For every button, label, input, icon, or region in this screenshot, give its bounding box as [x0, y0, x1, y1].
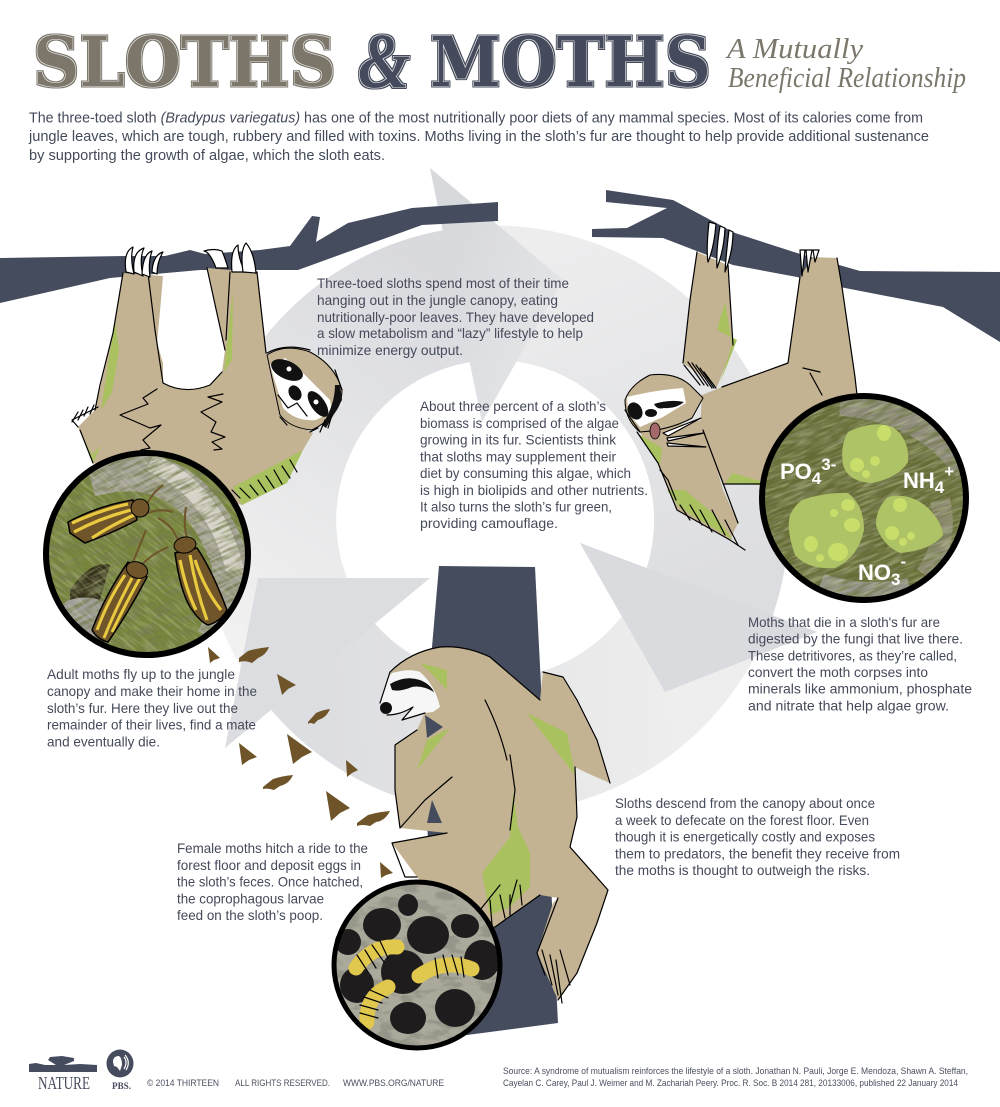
label: phosphate: 4	[812, 469, 822, 488]
hand claws on branch	[707, 222, 819, 276]
caption: adult moths: canopy and make their home in the	[47, 683, 257, 699]
moth: lower left	[92, 530, 168, 642]
eye band and nose	[380, 678, 434, 714]
circle ring	[762, 396, 966, 600]
fur background	[765, 399, 963, 597]
caption: descent: them to predators, the benefit they receive from	[615, 846, 900, 862]
caption: canopy: a slow metabolism and “lazy” lifestyle to help	[317, 325, 583, 341]
footer copyright: WWW.PBS.ORG/NATURE	[343, 1078, 444, 1089]
logo: PBS: PBS.	[112, 1082, 131, 1092]
label: nitrate: NO	[858, 560, 891, 585]
logo: Nature: NATURE	[38, 1073, 90, 1093]
caption: fungi: digested by the fungi that live there.	[748, 630, 963, 646]
claws on chest	[663, 418, 706, 447]
intro paragraph	[28, 110, 929, 164]
intro paragraph: The three-toed sloth (Bradypus variegatus) has one of the most nutritionally poor diets of any mammal species. Most of its calories come from	[29, 110, 923, 126]
caption: adult moths: sloth’s fur. Here they live out the	[47, 700, 238, 716]
intro paragraph: by supporting the growth of algae, which the sloth eats.	[29, 147, 385, 164]
algae cell: lower left	[789, 493, 864, 568]
tongue	[650, 423, 660, 439]
fur sketch lines	[380, 647, 610, 1000]
algae patches	[637, 302, 763, 540]
sloth hanging from right branch	[624, 222, 858, 550]
sloth hanging from left branch	[72, 243, 342, 505]
caption: adult moths: remainder of their lives, find a mate	[47, 716, 256, 732]
caption: fungi: These detritivores, as they’re called,	[748, 648, 957, 664]
caption: canopy	[317, 275, 594, 358]
caption: algae biomass: providing camouflage.	[420, 515, 558, 531]
raised arm	[683, 252, 733, 387]
caption: fungi: convert the moth corpses into	[748, 664, 928, 680]
caption: algae biomass: diet by consuming this algae, which	[420, 465, 631, 481]
head	[625, 374, 703, 432]
fur sketch lines	[625, 252, 857, 550]
logo: Nature	[29, 1056, 97, 1093]
title ampersand: &	[358, 17, 410, 104]
sloth climbing the trunk	[380, 647, 610, 1003]
label: ammonium: NH	[903, 468, 935, 493]
caption: female moths: feed on the sloth’s poop.	[177, 907, 323, 923]
caption: algae biomass: biomass is comprised of the algae	[420, 415, 619, 431]
caption: fungi	[748, 614, 972, 714]
label: ammonium: +	[944, 462, 954, 481]
caption: descent: a week to defecate on the forest floor. Even	[615, 812, 869, 828]
caption: algae biomass: About three percent of a sloth’s	[420, 398, 606, 414]
caption: female moths: Female moths hitch a ride to the	[177, 840, 368, 856]
caption: algae biomass: It also turns the sloth’s fur green,	[420, 498, 612, 514]
hatch fur	[490, 885, 570, 1003]
caption: canopy: nutritionally-poor leaves. They have developed	[317, 309, 594, 325]
fur background	[49, 456, 245, 652]
face mask	[380, 670, 440, 720]
caption: fungi: and nitrate that help algae grow.	[748, 698, 949, 714]
label: phosphate: PO	[780, 459, 812, 484]
caption: female moths: forest floor and deposit eggs in	[177, 857, 361, 873]
subtitle	[725, 33, 966, 94]
caption: adult moths: and eventually die.	[47, 734, 160, 750]
label: ammonium: 4	[935, 478, 945, 497]
moth: upper left	[68, 485, 173, 543]
sloth face mask	[270, 358, 332, 420]
caption: female moths	[177, 840, 368, 923]
subtitle: Beneficial Relationship	[728, 62, 966, 94]
sloth body	[78, 268, 313, 505]
algae cell: top	[842, 424, 908, 483]
left branch	[0, 202, 498, 303]
sloth eyes and nose	[268, 355, 342, 428]
caption: descent: though it is energetically costly and exposes	[615, 828, 875, 844]
caption: fungi: Moths that die in a sloth's fur are	[748, 614, 940, 630]
sloth left claws	[125, 243, 256, 277]
sloth algae patches	[83, 290, 303, 505]
caption: canopy: Three-toed sloths spend most of their time	[317, 275, 569, 291]
magnified circle: larvae in feces	[330, 880, 505, 1050]
arrow band: right to left along the bottom	[225, 543, 817, 813]
caption: algae biomass: growing in its fur. Scientists think	[420, 432, 617, 448]
lower arm	[640, 420, 738, 540]
sloth body	[390, 647, 610, 1000]
caption: algae biomass	[420, 398, 648, 531]
circle ring	[46, 453, 248, 655]
logo: PBS	[106, 1050, 134, 1092]
caption: female moths: the sloth’s feces. Once hatched,	[177, 874, 363, 890]
small moths group	[208, 647, 220, 663]
caption: descent	[615, 795, 900, 878]
flying moth silhouettes	[208, 647, 393, 878]
caption: descent: Sloths descend from the canopy about once	[615, 795, 875, 811]
caption: canopy: hanging out in the jungle canopy, eating	[317, 292, 558, 308]
algae patches	[417, 663, 575, 915]
footer copyright: © 2014 THIRTEEN	[147, 1078, 219, 1089]
caption: canopy: minimize energy output.	[317, 342, 463, 358]
torso and back arm	[700, 257, 858, 484]
circle ring	[334, 882, 500, 1048]
caption: fungi: minerals like ammonium, phosphate	[748, 680, 972, 696]
arrow band: left to top	[201, 168, 563, 700]
feces pellets	[335, 894, 500, 1034]
subtitle: A Mutually	[725, 33, 863, 65]
label: phosphate: 3-	[821, 455, 836, 474]
tree trunk	[427, 566, 558, 1035]
caption: algae biomass: that sloths may supplement their	[420, 448, 616, 464]
footer copyright: ALL RIGHTS RESERVED.	[235, 1078, 330, 1089]
arrow band: top to right	[430, 168, 817, 692]
caption: algae biomass: is high in biolipids and other nutrients.	[420, 482, 648, 498]
intro paragraph: jungle leaves, which are tough, rubbery and filled with toxins. Moths living in the sloth’s fur are thought to help provide additional sustenance	[28, 128, 929, 145]
right branch	[592, 190, 1000, 342]
magnified circle: moths in fur	[43, 450, 251, 658]
cycle diagram: three grey arrows	[201, 168, 817, 813]
sloth hatch fur	[72, 405, 297, 498]
moth: right	[158, 507, 227, 625]
algae cell: lower right	[876, 496, 943, 553]
larvae segments	[357, 941, 464, 1018]
face mask	[627, 388, 686, 427]
larvae	[356, 947, 472, 1022]
caption: adult moths: Adult moths fly up to the jungle	[47, 666, 235, 682]
caption: female moths: the coprophagous larvae	[177, 890, 324, 906]
footer copyright	[147, 1078, 444, 1089]
hatch fur	[660, 362, 738, 545]
sloth head	[267, 348, 342, 430]
trunk visible through arm gaps	[425, 715, 443, 823]
magnified circle: algae and minerals	[759, 393, 969, 603]
label: nitrate: 3	[891, 570, 900, 589]
title word: Moths: MOTHS	[430, 23, 711, 103]
sloth fur sketch lines	[72, 268, 287, 463]
gravel background	[336, 884, 498, 1046]
eyes and nose	[624, 400, 684, 422]
caption: descent: the moths is thought to outweigh the risks.	[615, 862, 870, 878]
label: nitrate: -	[900, 552, 906, 571]
caption: adult moths	[47, 666, 257, 750]
source citation	[503, 1066, 968, 1089]
title	[33, 17, 711, 104]
title word: Sloths: SLOTHS	[33, 23, 336, 103]
